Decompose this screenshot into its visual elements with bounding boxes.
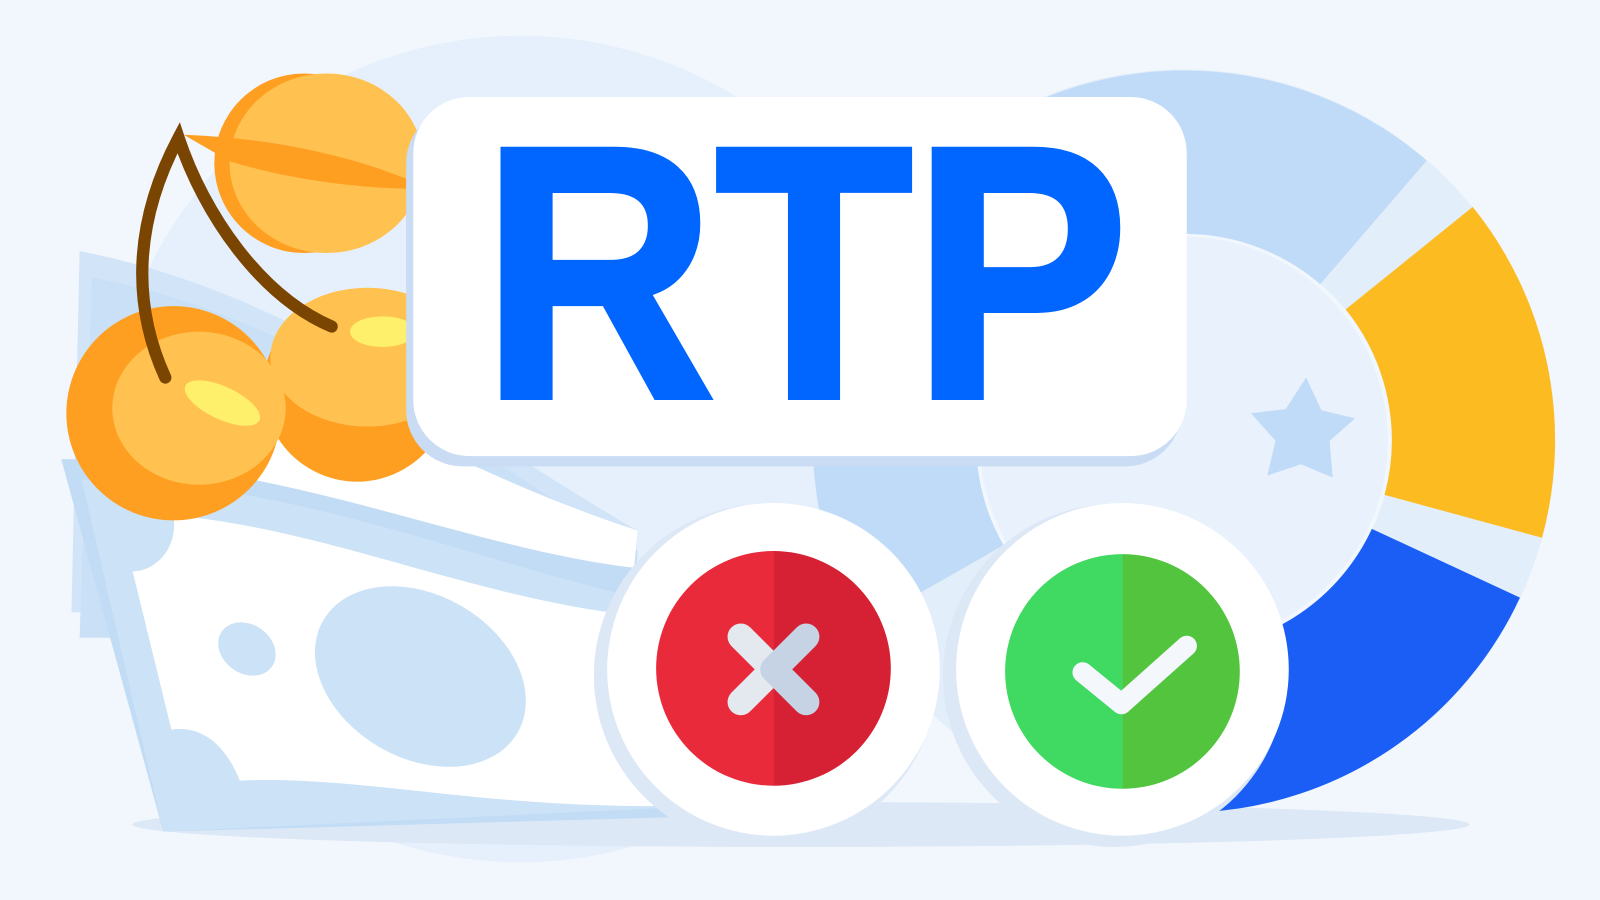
ground shadow — [133, 802, 1469, 847]
gauge — [894, 151, 1473, 731]
RTP card — [406, 73, 1187, 474]
background circle — [107, 36, 934, 862]
money bills — [61, 251, 704, 832]
cherries — [66, 73, 464, 520]
title: RTP: RTP — [482, 73, 1129, 474]
icon: red cross — [594, 503, 940, 847]
icon: green check — [943, 503, 1289, 847]
icon: star — [1251, 378, 1355, 478]
